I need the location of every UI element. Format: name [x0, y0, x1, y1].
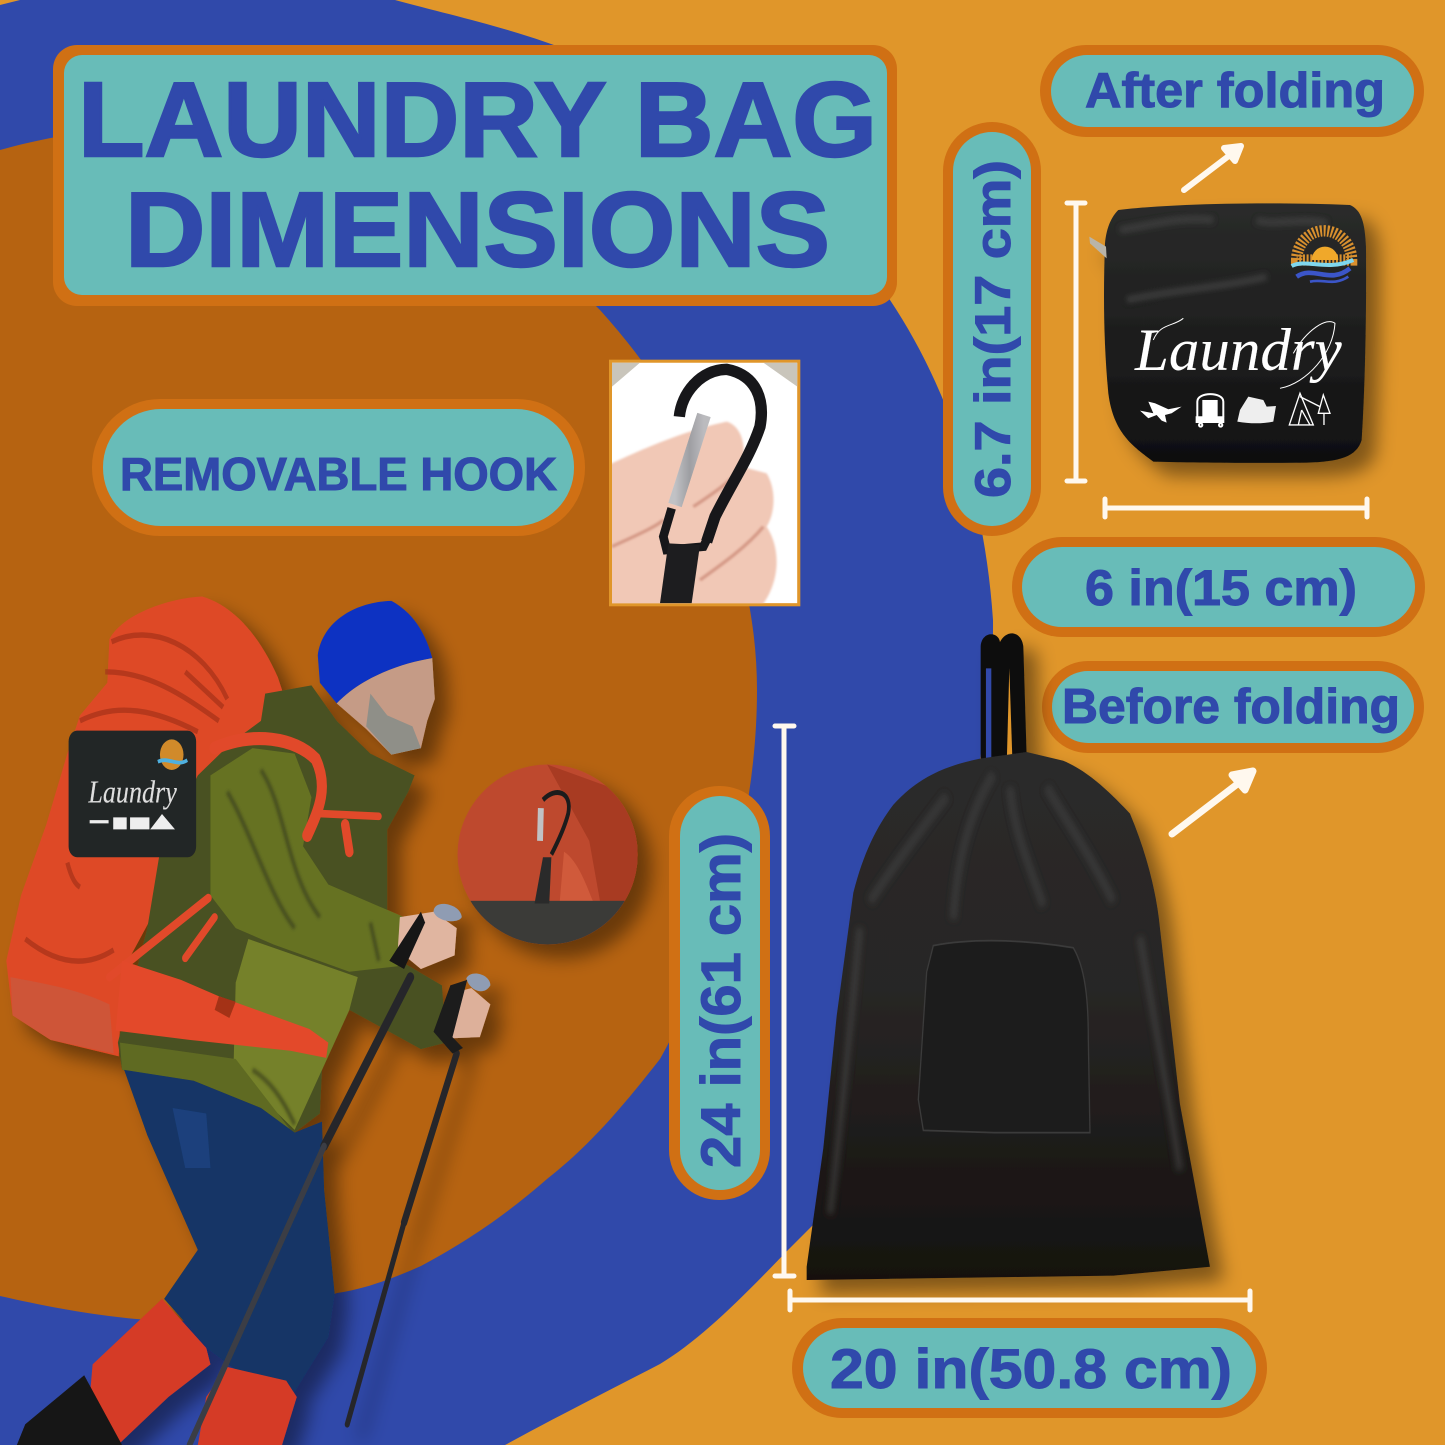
- folded bag: [1089, 203, 1366, 463]
- hook body: [679, 369, 761, 542]
- finger creases: [612, 467, 763, 580]
- title panel: [53, 45, 897, 306]
- bag body: [807, 752, 1210, 1280]
- label: before folding: [1042, 661, 1424, 753]
- face: [337, 658, 435, 755]
- folded pouch body: [1104, 203, 1366, 463]
- hook strap: [660, 543, 700, 603]
- backpack: [6, 597, 290, 1056]
- handle gaps: [986, 668, 991, 767]
- shoulder straps: [109, 739, 379, 977]
- label: 20 in width: [792, 1318, 1267, 1418]
- hat: [318, 601, 432, 703]
- icon: cruise ship: [1237, 397, 1276, 423]
- background shape: dark orange circle: [0, 125, 757, 1321]
- icon: airplane: [1140, 402, 1182, 423]
- full laundry bag: [807, 633, 1210, 1280]
- trekking poles: [189, 977, 457, 1445]
- photo: carabiner hook: [607, 360, 800, 608]
- jacket highlights: [210, 748, 404, 972]
- jacket: [118, 685, 446, 1133]
- folded pouch highlights: [1120, 219, 1327, 300]
- label: before folding: Before folding: [1062, 680, 1400, 734]
- script swashes: [1153, 318, 1335, 388]
- packed bag on backpack: [69, 731, 196, 857]
- jacket wrinkles: [227, 770, 379, 1124]
- hook pin: [675, 415, 704, 505]
- label: 6.7 in height: 6.7 in(17 cm): [965, 160, 1021, 498]
- label: removable hook: [92, 399, 585, 536]
- left boot: [17, 1375, 122, 1445]
- label: 6 in width: [1012, 537, 1425, 637]
- dimension line: bag width: [790, 1291, 1250, 1310]
- icon: luggage cart: [1197, 394, 1223, 427]
- dimension line: bag height: [775, 726, 794, 1276]
- script word on packed bag: Laundry: [87, 776, 177, 811]
- label: 6 in width: 6 in(15 cm): [1085, 560, 1357, 616]
- arrow: to after folding: [1184, 146, 1241, 190]
- title line 2: DIMENSIONS: [125, 171, 830, 289]
- icon: tent and tree: [1289, 393, 1330, 425]
- label: 20 in width: 20 in(50.8 cm): [830, 1337, 1232, 1400]
- folded pouch zipper pull: [1089, 237, 1107, 258]
- backpack folds: [25, 635, 227, 961]
- inset: hook on backpack: [458, 764, 638, 944]
- label: 6.7 in height: [943, 122, 1041, 536]
- arrow: to before folding: [1172, 771, 1253, 834]
- hands and grips: [389, 904, 490, 1054]
- label: 24 in height: [669, 786, 770, 1200]
- trousers: [124, 1070, 335, 1392]
- dimension line: folded height: [1067, 203, 1085, 481]
- label: after folding: [1040, 45, 1424, 137]
- left gaiter: [88, 1299, 210, 1445]
- label: after folding: After folding: [1085, 64, 1385, 118]
- right gaiter: [198, 1367, 297, 1445]
- bag handles: [981, 633, 1027, 761]
- logo: sun and waves: [1292, 231, 1353, 282]
- backpack faded lower panel: [11, 977, 114, 1054]
- pocket: [918, 941, 1090, 1133]
- label: 24 in height: 24 in(61 cm): [689, 833, 752, 1168]
- hip belt: [116, 961, 328, 1058]
- label: removable hook: REMOVABLE HOOK: [120, 448, 557, 500]
- script word: Laundry: Laundry: [1134, 317, 1342, 383]
- hiker with backpack: [6, 597, 490, 1445]
- bag folds: [830, 774, 1180, 1214]
- title line 1: LAUNDRY BAG: [78, 61, 877, 179]
- dimension line: folded width: [1105, 499, 1367, 517]
- background shape: blue swirl: [0, 0, 993, 1445]
